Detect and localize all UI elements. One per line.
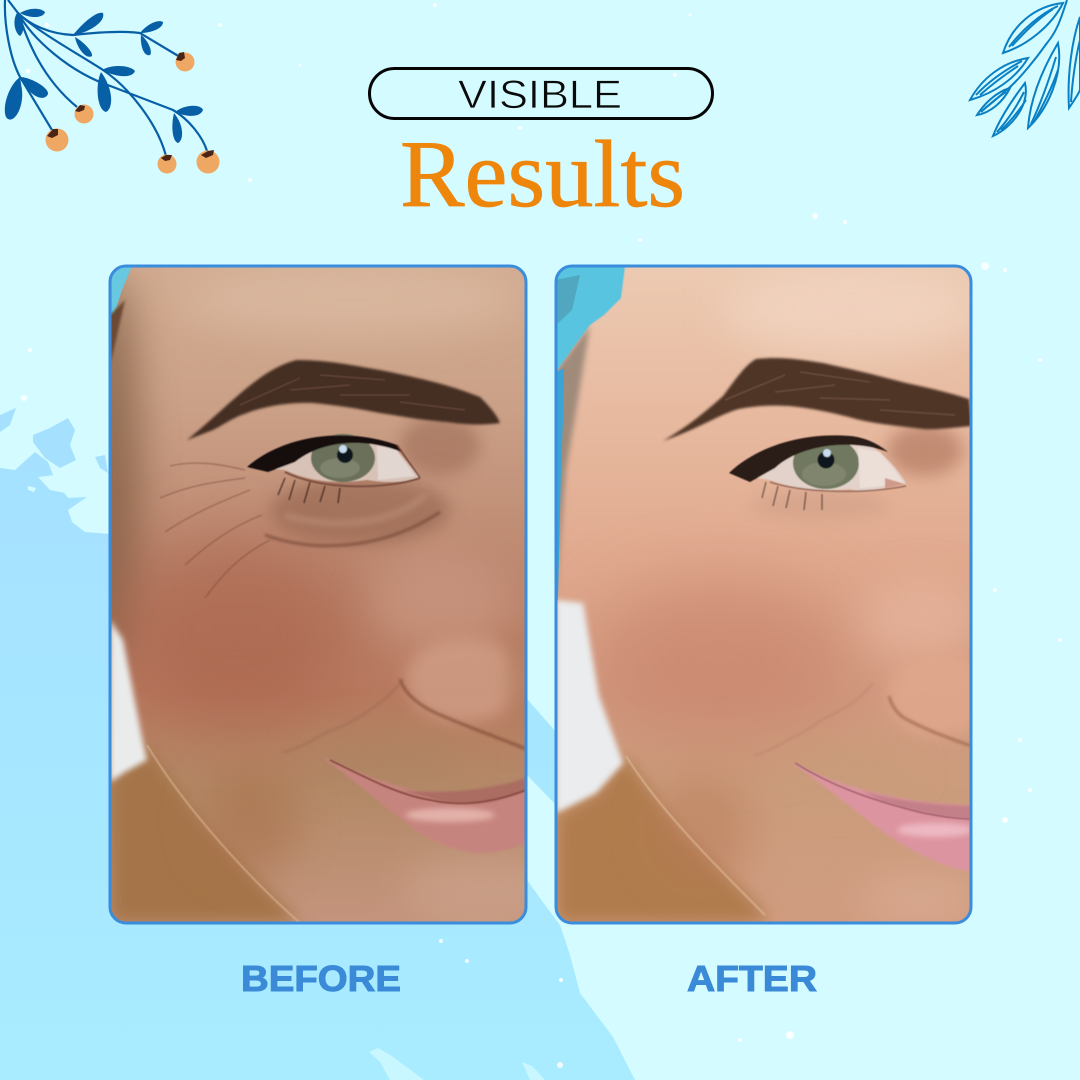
background brush stroke: [0, 408, 635, 1080]
nose: [405, 638, 525, 722]
hair shadow: [556, 325, 590, 600]
title: Results: Results: [400, 121, 685, 227]
crow's feet: [160, 463, 270, 598]
eye: [729, 435, 906, 510]
eyebrow: [187, 360, 500, 440]
icon: top right leaves: [970, 0, 1080, 136]
eye socket: [887, 424, 963, 476]
jaw line: [626, 756, 765, 915]
eye socket and under-eye bag: [270, 476, 450, 544]
icon: branch with orange berries: [5, 0, 219, 174]
panel: after photo: [556, 265, 992, 925]
neck: [556, 756, 770, 923]
cap: [112, 268, 132, 315]
eyebrow: [663, 358, 972, 441]
heading pill: VISIBLE: VISIBLE: [458, 73, 622, 117]
cap: [556, 266, 625, 372]
label: AFTER: AFTER: [687, 958, 817, 999]
lips: [317, 754, 526, 853]
nose: [892, 668, 970, 734]
panel: before photo: [108, 264, 528, 924]
eye: [247, 434, 420, 503]
face shading: [590, 265, 980, 925]
towel: [556, 600, 623, 813]
label: BEFORE: BEFORE: [241, 958, 401, 999]
neck: [110, 745, 300, 923]
face shading: [112, 270, 524, 916]
heading pill: VISIBLE: [370, 68, 712, 118]
lips: [789, 761, 973, 871]
towel: [110, 620, 147, 782]
jaw line: [147, 745, 300, 923]
